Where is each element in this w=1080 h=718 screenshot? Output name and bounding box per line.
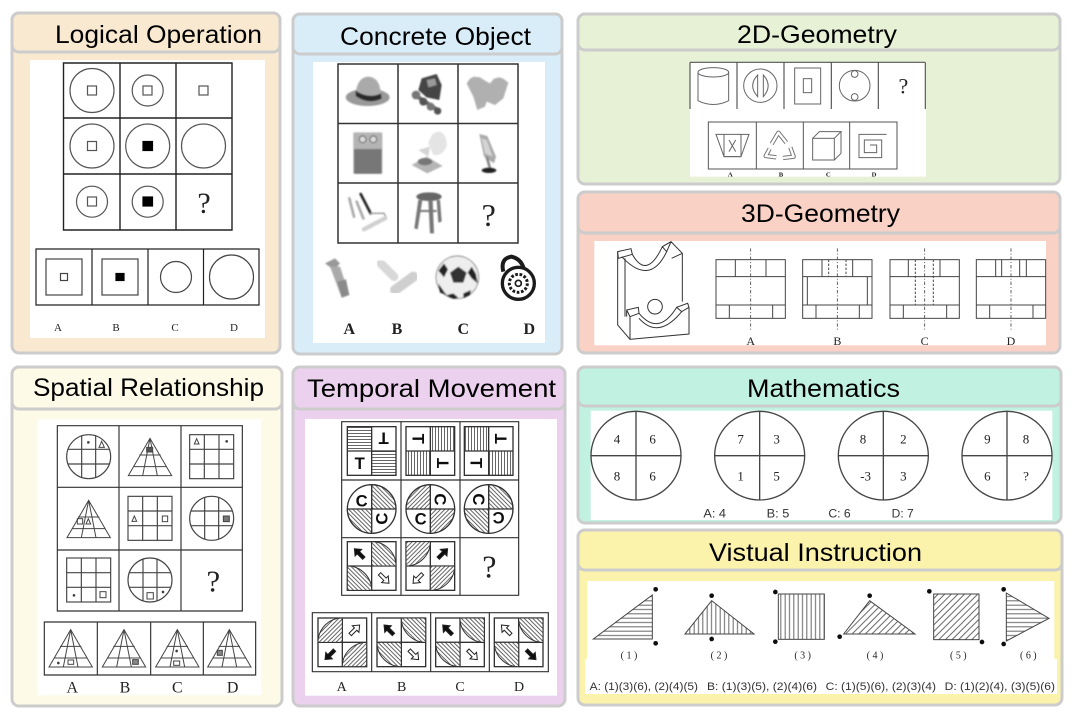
- circle 4: ?: [1023, 468, 1029, 483]
- icon: combination lock: [502, 257, 534, 299]
- icon: radio: [353, 132, 382, 174]
- circle 2: 3: [773, 432, 780, 447]
- figure 3: [773, 590, 824, 661]
- option letters: B: [397, 680, 406, 695]
- panel: Logical Operation: [12, 13, 280, 353]
- answer options: [36, 249, 259, 305]
- icon: monitor: [479, 134, 496, 173]
- figure 4: [837, 593, 915, 661]
- option letters: C: [172, 680, 183, 697]
- option letters: [746, 334, 1016, 348]
- figure 3: ( 3 ): [794, 650, 811, 661]
- option letters: [344, 321, 535, 338]
- option letters: A: [67, 680, 79, 697]
- answer options: B: 5: [767, 506, 790, 520]
- option letters: D: [872, 171, 877, 178]
- puzzle: spatial relationship: [38, 419, 261, 697]
- circle 4: 8: [1023, 432, 1029, 447]
- icon: gloves: [467, 77, 508, 110]
- icon: stool: [414, 192, 442, 233]
- heading: Mathematics: Mathematics: [747, 375, 900, 403]
- circle 2: 5: [773, 468, 780, 483]
- option letters: A: [54, 322, 62, 334]
- panel: Vistual Instruction: [578, 530, 1062, 705]
- sequence row: ?: [898, 73, 908, 98]
- answer options: B: (1)(3)(5), (2)(4)(6): [707, 681, 817, 693]
- figure 1: [593, 587, 658, 661]
- row 2: C circles: [347, 485, 513, 533]
- option letters: B: [779, 171, 784, 178]
- option letters: B: [392, 321, 403, 338]
- option letters: B: [120, 680, 130, 697]
- option letters: D: [514, 680, 524, 695]
- option letters: A: [728, 171, 733, 178]
- puzzle: temporal movement: [305, 419, 557, 696]
- option C: [890, 248, 959, 330]
- question mark: ?: [482, 197, 496, 233]
- option letters: [67, 680, 238, 697]
- row 1: T blocks: T: [379, 429, 389, 448]
- circle 2: 1: [737, 468, 744, 483]
- option letters: C: [826, 171, 831, 178]
- icon: hat: [346, 77, 390, 106]
- circle 4: 9: [984, 432, 991, 447]
- 3D solid object: [618, 242, 689, 339]
- circle 4: [962, 411, 1052, 500]
- heading: Logical Operation: Logical Operation: [55, 21, 262, 49]
- panel: Concrete Object: [293, 14, 562, 354]
- row 3: arrows and quarter circles: [347, 542, 496, 590]
- puzzle: logical operation: [30, 60, 265, 338]
- heading: Mathematics: [578, 367, 1061, 406]
- figure 6: ( 6 ): [1020, 650, 1037, 661]
- option letters: C: [171, 322, 179, 334]
- heading: Spatial Relationship: Spatial Relationship: [33, 374, 264, 402]
- puzzle: 2D shapes: [690, 62, 926, 178]
- row 2: C circles: C: [415, 510, 427, 529]
- object matrix grid: [338, 64, 518, 243]
- icon: football: [436, 256, 479, 299]
- option letters: D: [227, 680, 238, 697]
- puzzle: number circles: [591, 411, 1052, 520]
- panel: 2D-Geometry: [578, 14, 1060, 184]
- answer options: C: 6: [828, 506, 851, 520]
- option letters: A: [344, 321, 356, 338]
- heading: Concrete Object: [293, 14, 562, 54]
- figure 5: [927, 589, 984, 661]
- panel: Mathematics: [578, 367, 1061, 523]
- object pictures: [325, 74, 535, 338]
- heading: 3D-Geometry: 3D-Geometry: [741, 200, 901, 228]
- option letters: A: [337, 680, 347, 695]
- option B: [803, 248, 872, 330]
- row 1: T blocks: T: [355, 454, 365, 473]
- option A: [716, 248, 785, 330]
- row 1: T blocks: T: [433, 458, 452, 468]
- figure 1: ( 1 ): [621, 650, 637, 661]
- option D: [976, 248, 1046, 330]
- row 2: C circles: C: [431, 493, 450, 505]
- circle 3: -3: [860, 468, 871, 483]
- option letters: A: [746, 334, 755, 348]
- circle 3: 2: [900, 432, 907, 447]
- heading: Concrete Object: Concrete Object: [340, 23, 531, 51]
- option letters: D: [524, 321, 535, 338]
- 3x3 matrix grid: [342, 422, 519, 595]
- figure 6: [1001, 587, 1049, 661]
- circle 3: [838, 411, 928, 500]
- panel: Spatial Relationship: [12, 367, 282, 706]
- circle 3: 3: [900, 468, 907, 483]
- panel: Temporal Movement: [293, 367, 565, 706]
- row 1: T blocks: T: [492, 434, 511, 444]
- answer options: [590, 681, 1055, 693]
- panel: 3D-Geometry: [578, 192, 1060, 353]
- answer options: C: (1)(5)(6), (2)(3)(4): [826, 681, 936, 693]
- icon: fire extinguisher: [325, 258, 349, 298]
- answer options: D: (1)(2)(4), (3)(5)(6): [945, 681, 1055, 693]
- option letters: [54, 322, 238, 334]
- answer options: [312, 613, 548, 672]
- answer options: A: (1)(3)(6), (2)(4)(5): [590, 681, 698, 693]
- heading: Vistual Instruction: [578, 530, 1062, 570]
- icon: pills: [381, 263, 413, 290]
- option letters: [728, 171, 877, 178]
- row 2: C circles: C: [356, 492, 368, 511]
- sequence row: [690, 62, 925, 109]
- figure 4: ( 4 ): [867, 650, 883, 661]
- figure 2: [685, 593, 754, 661]
- heading: 2D-Geometry: 2D-Geometry: [737, 21, 898, 49]
- circle 1: [591, 411, 681, 500]
- option letters: B: [833, 334, 841, 348]
- heading: Temporal Movement: Temporal Movement: [307, 375, 556, 403]
- figure 5: ( 5 ): [950, 650, 967, 661]
- 3x3 matrix: [64, 63, 232, 230]
- row 1: T blocks: [347, 427, 513, 475]
- heading: Spatial Relationship: [12, 367, 282, 409]
- heading: Logical Operation: [12, 13, 280, 52]
- circle 1: 6: [649, 432, 656, 447]
- circle 2: [715, 411, 805, 500]
- option letters: [337, 680, 524, 695]
- figure 2: ( 2 ): [711, 650, 727, 661]
- option letters: B: [112, 322, 120, 334]
- answer options: [708, 122, 897, 169]
- row 2: C circles: C: [493, 508, 505, 527]
- icon: paint tools: [349, 194, 387, 229]
- 3x3 matrix: ?: [207, 565, 220, 599]
- puzzle: 3D views: [594, 241, 1046, 348]
- icon: roller skate: [412, 74, 442, 115]
- option letters: D: [230, 322, 238, 334]
- answer options: [44, 622, 256, 675]
- row 1: T blocks: T: [408, 434, 427, 444]
- heading: 2D-Geometry: [578, 14, 1060, 50]
- heading: 3D-Geometry: [578, 192, 1060, 233]
- answer options: D: 7: [892, 506, 914, 520]
- puzzle: concrete objects: [313, 62, 545, 343]
- answer options: A: 4: [703, 506, 726, 520]
- circle 1: 4: [614, 432, 621, 447]
- 3x3 matrix: [57, 426, 242, 611]
- answer options: [703, 506, 914, 520]
- icon: gramophone: [412, 132, 447, 173]
- circle 1: 6: [649, 468, 656, 483]
- circle 4: 6: [984, 468, 991, 483]
- option letters: D: [1007, 334, 1016, 348]
- option letters: C: [458, 321, 469, 338]
- heading: Temporal Movement: [293, 367, 565, 409]
- circle 3: 8: [860, 432, 866, 447]
- row 2: C circles: C: [469, 493, 488, 505]
- option letters: C: [455, 680, 465, 695]
- heading: Vistual Instruction: Vistual Instruction: [709, 539, 922, 567]
- 3x3 matrix: ?: [197, 187, 211, 220]
- circle 1: 8: [614, 468, 620, 483]
- puzzle: hatched figures: [585, 581, 1057, 694]
- circle 2: 7: [737, 432, 744, 447]
- row 3: arrows and quarter circles: ?: [482, 548, 496, 584]
- row 1: T blocks: T: [467, 458, 486, 468]
- row 2: C circles: C: [372, 513, 391, 525]
- option letters: C: [921, 334, 929, 348]
